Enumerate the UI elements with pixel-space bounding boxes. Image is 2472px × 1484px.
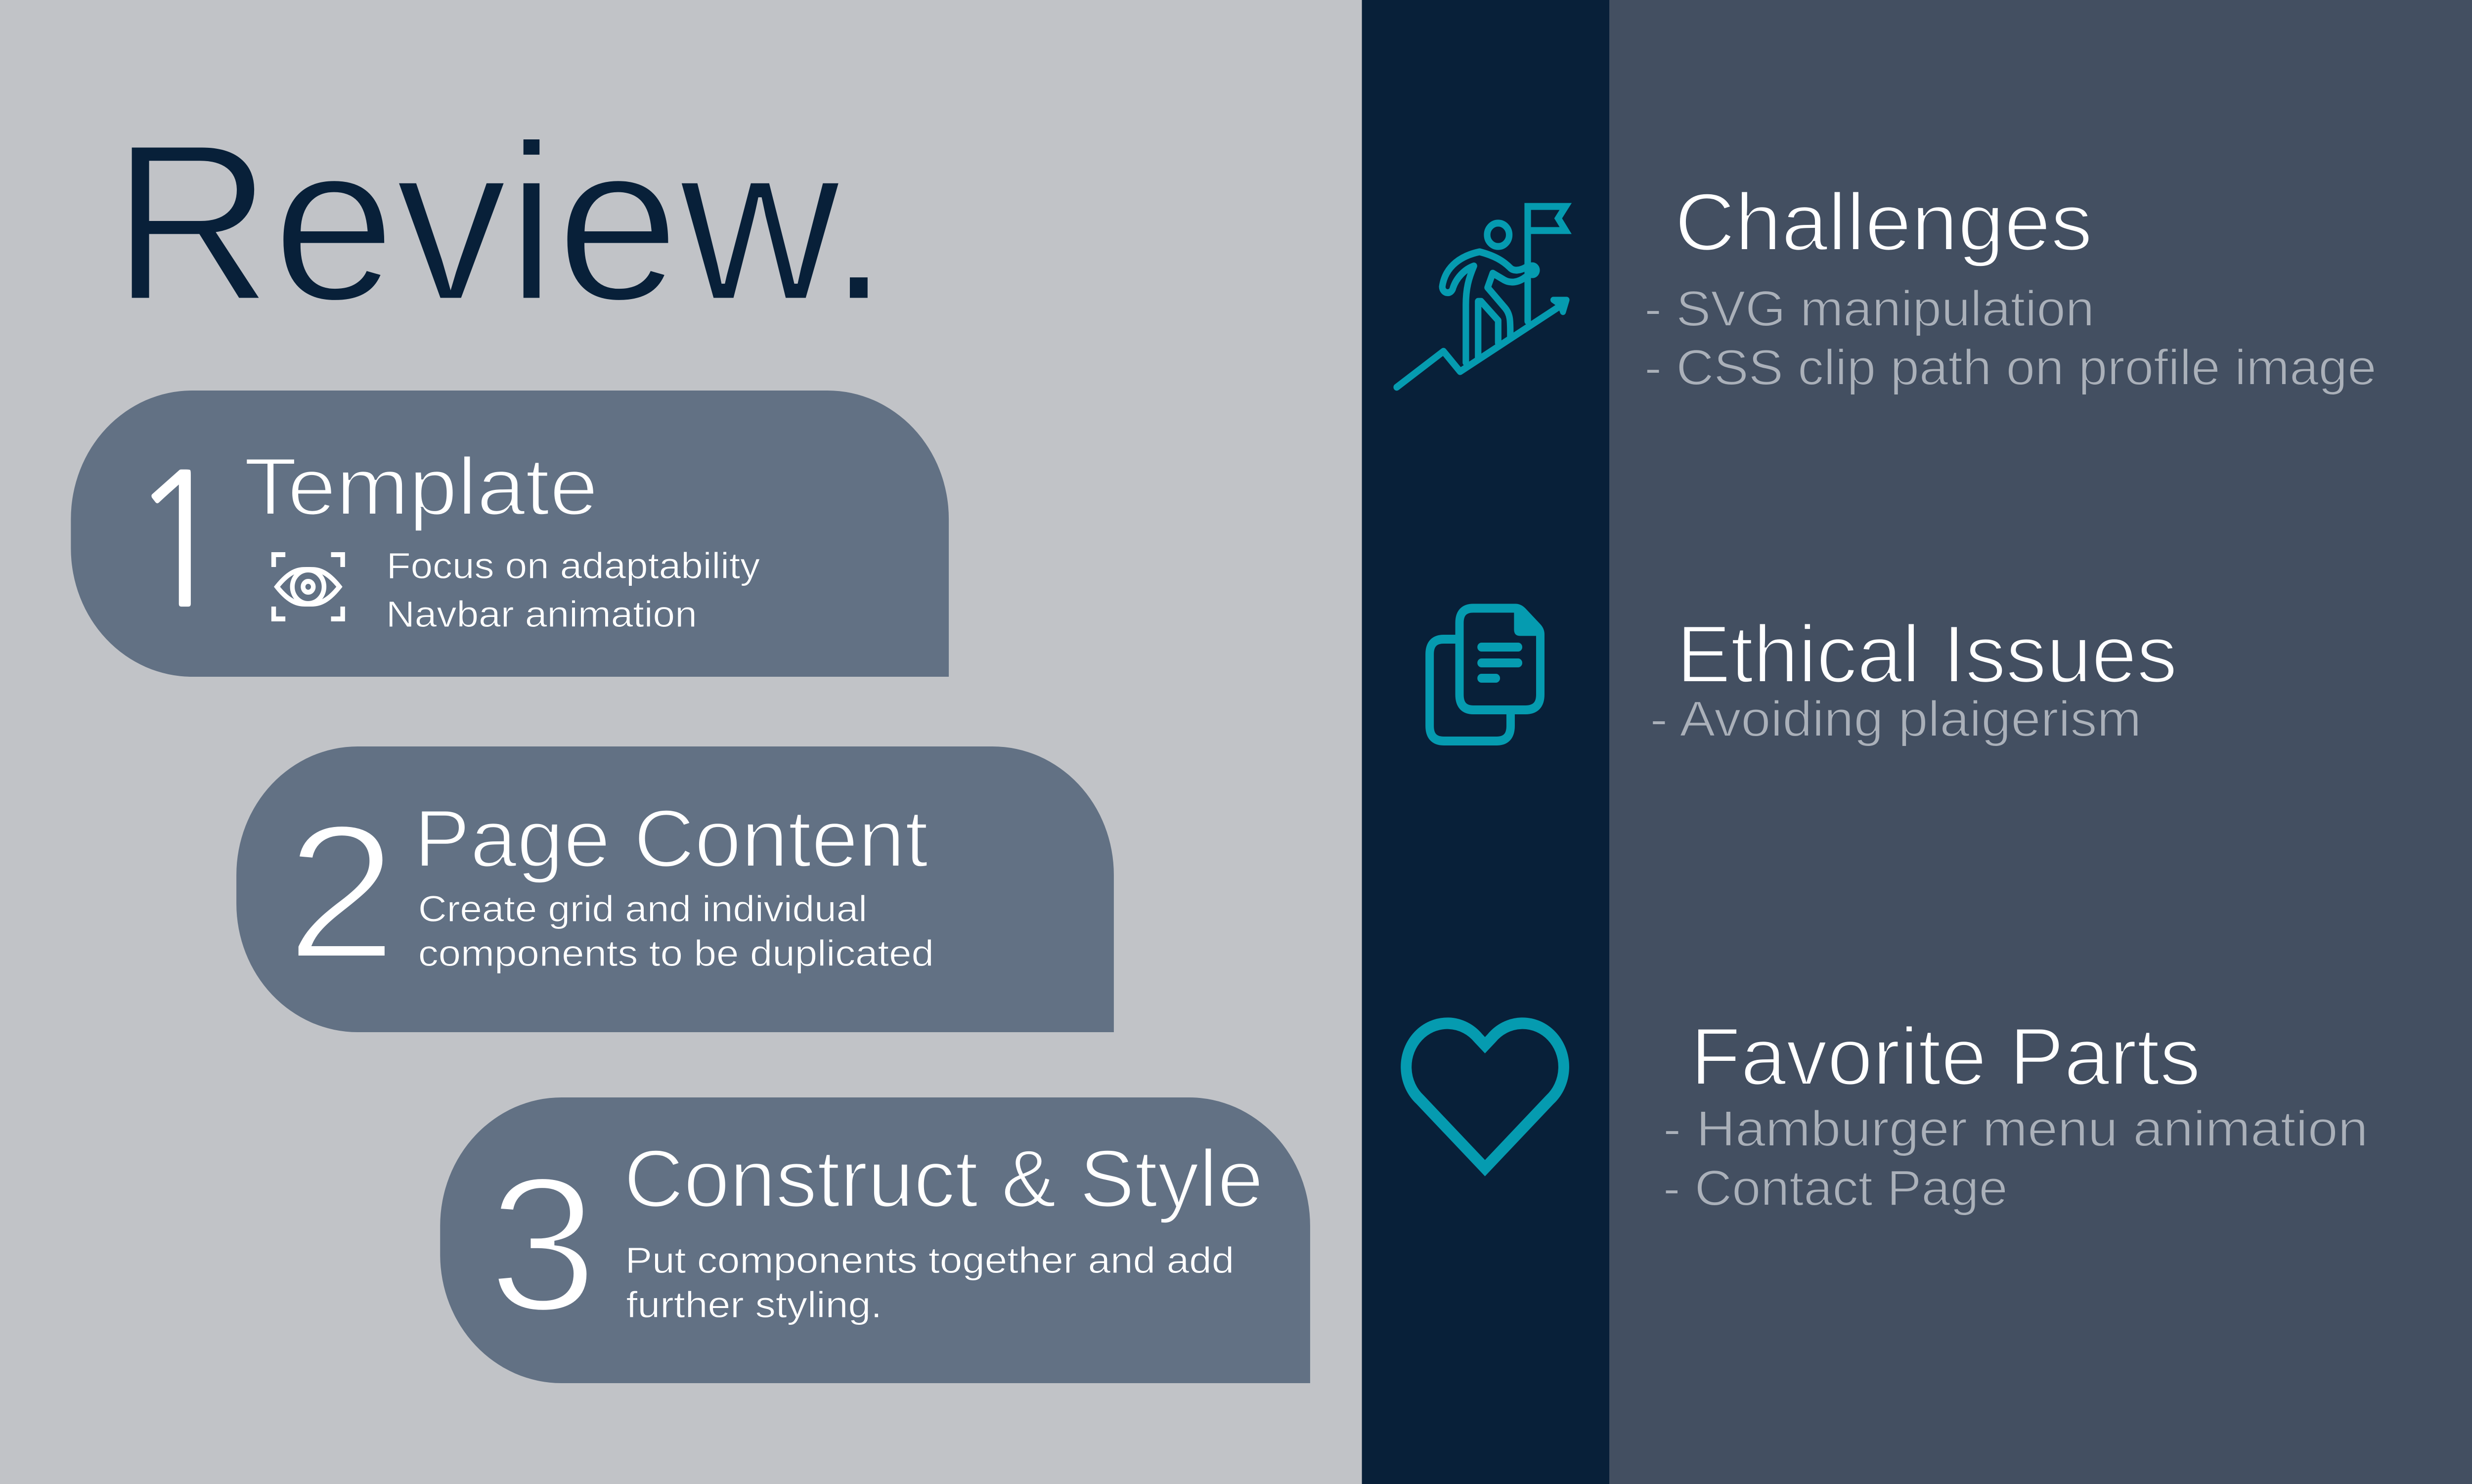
panel: right background <box>1609 0 2472 1484</box>
card shape 1 <box>71 391 949 677</box>
text: SVG manipulation: - SVG manipulation <box>1644 280 2094 337</box>
panel: Ethical Issues <box>1650 609 2177 747</box>
panel: step 3 Construct and Style <box>440 1097 1310 1383</box>
text: Avoiding plaigerism: - Avoiding plaigerism <box>1650 691 2141 747</box>
text: Put components together and add: Put components together and add <box>625 1240 1234 1281</box>
card shape 2 <box>236 746 1114 1032</box>
icon: heart <box>1406 1023 1564 1168</box>
panel: step 1 Template <box>71 391 949 677</box>
step number 2: 2 <box>286 785 397 999</box>
text: further styling.: further styling. <box>626 1285 882 1325</box>
panel: left background <box>0 0 1362 1484</box>
icon: climber with flag on rising arrow <box>1397 207 1567 387</box>
step number 3: 3 <box>488 1137 598 1351</box>
icon: eye in focus brackets <box>274 555 343 619</box>
text: Contact Page: - Contact Page <box>1663 1160 2008 1216</box>
icon: stacked documents <box>1430 608 1543 741</box>
text: CSS clip path on profile image: - CSS clip path on profile image <box>1644 339 2377 395</box>
text: Focus on adaptability: Focus on adaptability <box>387 546 760 586</box>
panel: Challenges <box>1644 176 2377 395</box>
heading: Challenges: Challenges <box>1675 176 2092 267</box>
panel: step 2 Page Content <box>236 746 1114 1032</box>
text: components to be duplicated: components to be duplicated <box>418 933 934 974</box>
card shape 3 <box>440 1097 1310 1383</box>
heading: Template: Template <box>244 441 598 532</box>
panel: icon column <box>1362 0 1609 1484</box>
step number 1: 1 <box>127 449 232 633</box>
heading: Favorite Parts: Favorite Parts <box>1690 1011 2201 1102</box>
panel: Favorite Parts <box>1663 1011 2368 1216</box>
text: Navbar animation: Navbar animation <box>386 594 697 635</box>
heading: Ethical Issues: Ethical Issues <box>1677 609 2177 699</box>
heading: Page Content: Page Content <box>414 793 928 884</box>
title: Review. <box>112 98 889 348</box>
heading: Construct and Style: Construct & Style <box>624 1133 1264 1224</box>
text: Create grid and individual: Create grid and individual <box>418 889 867 929</box>
text: Hamburger menu animation: - Hamburger menu animation <box>1663 1100 2368 1157</box>
